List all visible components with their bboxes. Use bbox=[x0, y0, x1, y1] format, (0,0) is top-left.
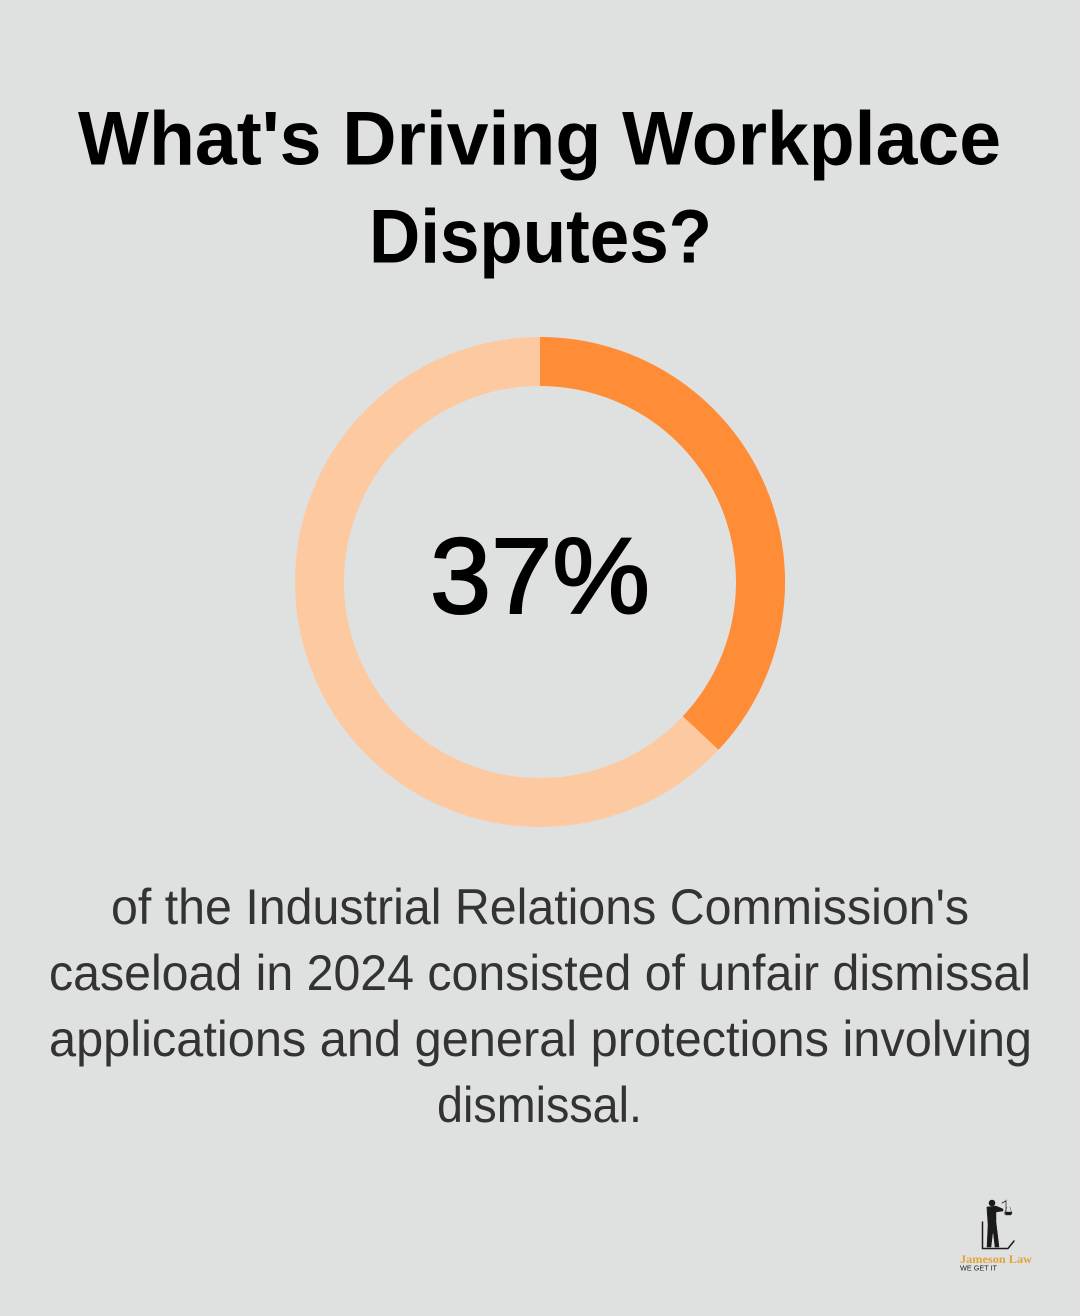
description text: applications and general protections involving bbox=[49, 1011, 1032, 1067]
icon: lady justice figure bbox=[982, 1200, 1014, 1248]
donut highlighted segment bbox=[540, 362, 761, 733]
title: Disputes? bbox=[369, 194, 712, 280]
title bbox=[78, 96, 1001, 280]
logo: Jameson Law bbox=[960, 1200, 1033, 1272]
title: What's Driving Workplace bbox=[78, 96, 1001, 182]
logo tagline: WE GET IT bbox=[960, 1264, 997, 1272]
description text: caseload in 2024 consisted of unfair dismissal bbox=[49, 945, 1031, 1001]
description text: dismissal. bbox=[437, 1077, 642, 1133]
description text: of the Industrial Relations Commission's bbox=[111, 879, 969, 935]
logo name: Jameson Law bbox=[960, 1254, 1033, 1266]
donut remainder track bbox=[320, 362, 760, 802]
big number: 37% bbox=[430, 515, 650, 636]
donut chart: 37% bbox=[320, 362, 761, 802]
description text bbox=[49, 879, 1032, 1133]
